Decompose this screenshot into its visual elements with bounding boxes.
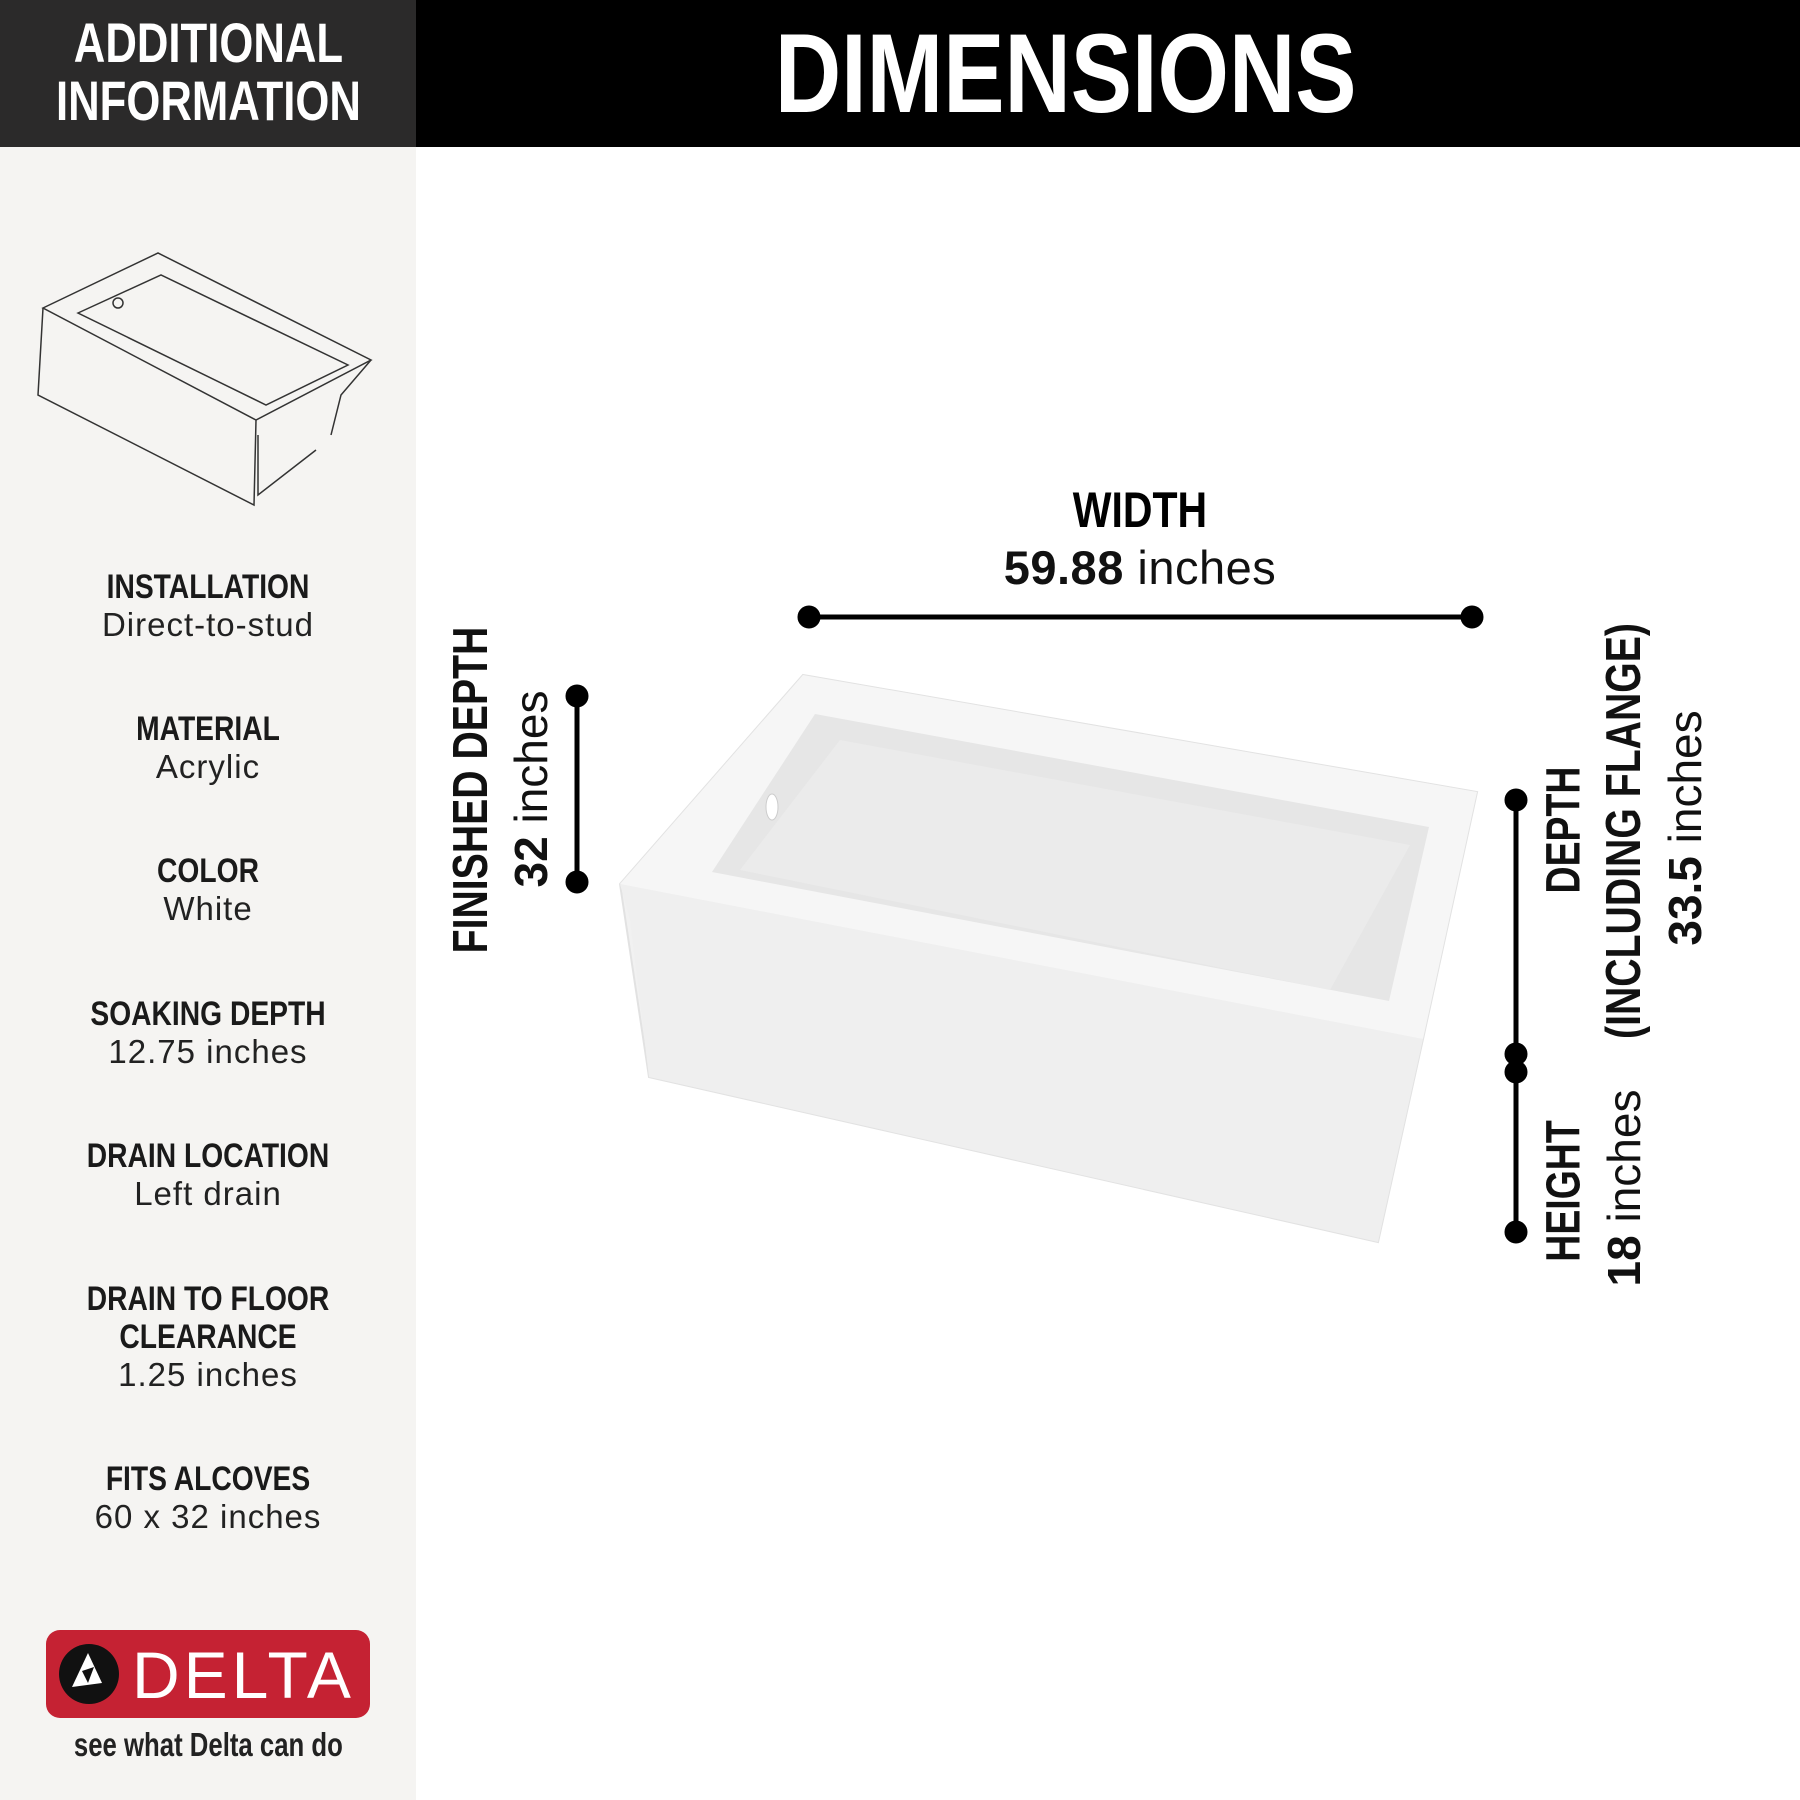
- spec: fits alcoves: [95, 1460, 321, 1535]
- height value: 18 inches: [1598, 1090, 1650, 1286]
- logo text: DELTA: [132, 1638, 355, 1712]
- spec: drain location: Left drain: [134, 1175, 282, 1212]
- spec: soaking depth: 12.75 inches: [108, 1033, 308, 1070]
- spec: drain to floor: DRAIN TO FLOOR: [87, 1280, 329, 1318]
- spec: drain to floor: 1.25 inches: [118, 1356, 298, 1393]
- depth value: 33.5 inches: [1659, 710, 1711, 946]
- left header panel: [0, 0, 416, 147]
- logo: delta: [46, 1630, 370, 1718]
- width label: WIDTH: [1073, 482, 1207, 538]
- spec: installation: [102, 568, 314, 643]
- spec: material: [136, 710, 280, 785]
- height label: HEIGHT: [1538, 1120, 1590, 1262]
- finished depth value: 32 inches: [505, 691, 557, 887]
- spec: drain location: DRAIN LOCATION: [87, 1137, 329, 1175]
- spec: installation: INSTALLATION: [107, 568, 309, 606]
- depth label: DEPTH: [1538, 767, 1590, 893]
- icon: delta triangle: [59, 1644, 119, 1704]
- spec: material: Acrylic: [156, 748, 260, 785]
- left header title: ADDITIONAL: [73, 11, 343, 74]
- tagline: see what Delta can do: [74, 1726, 342, 1763]
- left header title: [56, 11, 360, 132]
- including flange: (INCLUDING FLANGE): [1597, 623, 1651, 1039]
- icon: small tub line drawing: [37, 252, 372, 506]
- spec: color: White: [163, 890, 253, 927]
- spec: soaking depth: [90, 995, 326, 1070]
- main header bar: [416, 0, 1800, 147]
- width value: 59.88 inches: [1004, 541, 1276, 594]
- title: DIMENSIONS: [775, 11, 1357, 136]
- spec: soaking depth: SOAKING DEPTH: [90, 995, 326, 1033]
- spec: drain location: [87, 1137, 329, 1212]
- left header title: INFORMATION: [56, 69, 360, 132]
- spec: color: [157, 852, 259, 927]
- spec: drain to floor: [87, 1280, 329, 1393]
- left sidebar: [0, 147, 416, 1800]
- finished depth label: FINISHED DEPTH: [444, 627, 498, 953]
- spec: installation: Direct-to-stud: [102, 606, 314, 643]
- spec: material: MATERIAL: [136, 710, 280, 748]
- spec: fits alcoves: FITS ALCOVES: [106, 1460, 310, 1498]
- spec: drain to floor: CLEARANCE: [119, 1318, 297, 1356]
- spec: fits alcoves: 60 x 32 inches: [95, 1498, 321, 1535]
- spec: color: COLOR: [157, 852, 259, 890]
